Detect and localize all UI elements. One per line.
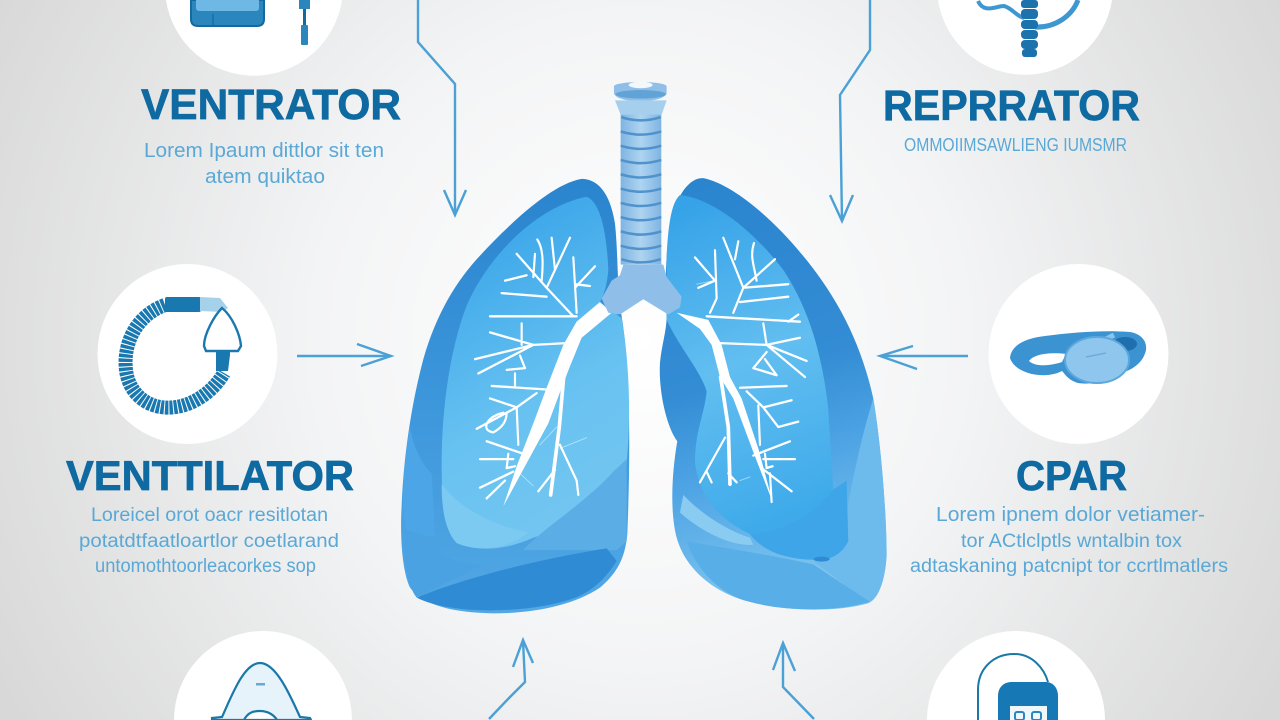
description: middle-right: tor ACtlclptls wntalbin tox — [961, 531, 1183, 552]
trachea and bronchi — [602, 82, 682, 315]
heading: VENTRATOR: VENTRATOR — [141, 81, 401, 129]
description: top-right: OMMOIIMSAWLIENG IUMSMR — [904, 135, 1127, 155]
arrow: top-right — [830, 0, 870, 221]
arrow: bottom-left — [489, 640, 533, 719]
description: middle-right: adtaskaning patcnipt tor ccrtlmatlers — [910, 556, 1228, 577]
arrow: middle-left — [297, 344, 391, 366]
arrow: bottom-right — [773, 643, 814, 719]
icon circle: top-left device — [166, 0, 342, 76]
panel: middle-right CPAP — [910, 264, 1228, 577]
heading: REPRRATOR: REPRRATOR — [883, 82, 1140, 130]
heading: VENTTILATOR: VENTTILATOR — [66, 452, 354, 499]
icon circle: tube and mask — [98, 264, 278, 444]
description: middle-left: untomothtoorleacorkes sop — [95, 556, 316, 577]
arrow: middle-right — [880, 346, 968, 369]
description: top-left: Lorem Ipaum dittlor sit ten — [144, 140, 384, 162]
description: top-left: atem quiktao — [205, 166, 325, 188]
heading: CPAR: CPAR — [1016, 452, 1127, 499]
icon circle: top-right device — [938, 0, 1112, 75]
left lung — [401, 179, 629, 613]
bronchial tree: left — [475, 238, 612, 506]
icon circle: bottom-right device — [927, 631, 1105, 720]
bronchial tree: right — [677, 238, 807, 502]
icon circle: bottom-left mask — [174, 631, 352, 720]
panel: top-right respirator device — [883, 0, 1140, 155]
panel: top-left ventilator device — [141, 0, 401, 188]
central lungs illustration — [401, 82, 887, 613]
description: middle-left: Loreicel orot oacr resitlotan — [91, 505, 328, 526]
description: middle-right: Lorem ipnem dolor vetiamer- — [936, 504, 1205, 526]
icon circle: CPAP mask — [988, 264, 1168, 444]
right lung — [660, 178, 887, 610]
description: top-left — [144, 140, 384, 188]
description: middle-left: potatdtfaatloartlor coetlarand — [79, 531, 339, 552]
description: middle-right — [910, 504, 1228, 577]
description: middle-left — [79, 505, 339, 577]
arrow: top-left — [418, 0, 466, 215]
panel: middle-left ventilator — [66, 264, 354, 577]
